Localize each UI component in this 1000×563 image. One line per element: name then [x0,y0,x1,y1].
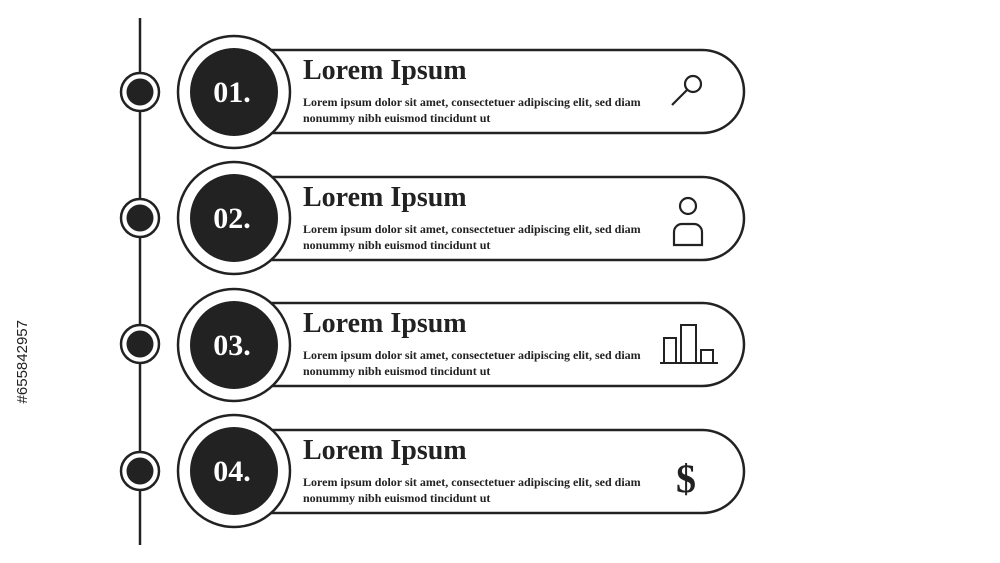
row 4 shapes: $ [676,456,696,501]
row 2 shapes: 02. [213,202,251,235]
row 1 shapes [121,36,744,148]
row 2 text: Lorem ipsum dolor sit amet, consectetuer adipiscing elit, sed diam nonummy nibh euismod tincidunt ut [303,222,641,252]
timeline line [139,18,141,545]
row 3 shapes [121,289,744,401]
row 3 heading: Lorem Ipsum [303,308,467,339]
row 4 heading: Lorem Ipsum [303,435,467,466]
row 4 text: Lorem ipsum dolor sit amet, consectetuer adipiscing elit, sed diam nonummy nibh euismod tincidunt ut [303,475,641,505]
row 2 heading: Lorem Ipsum [303,182,467,213]
stock id: #655842957 [14,320,31,403]
row 1 text: Lorem ipsum dolor sit amet, consectetuer adipiscing elit, sed diam nonummy nibh euismod tincidunt ut [303,95,641,125]
row 4 shapes: 04. [213,455,251,488]
row 1 shapes: 01. [213,76,251,109]
row 4 shapes [121,415,744,527]
row 3 text: Lorem ipsum dolor sit amet, consectetuer adipiscing elit, sed diam nonummy nibh euismod tincidunt ut [303,348,641,378]
row 1 heading: Lorem Ipsum [303,55,467,86]
row 2 shapes [121,162,744,274]
row 3 shapes: 03. [213,329,251,362]
